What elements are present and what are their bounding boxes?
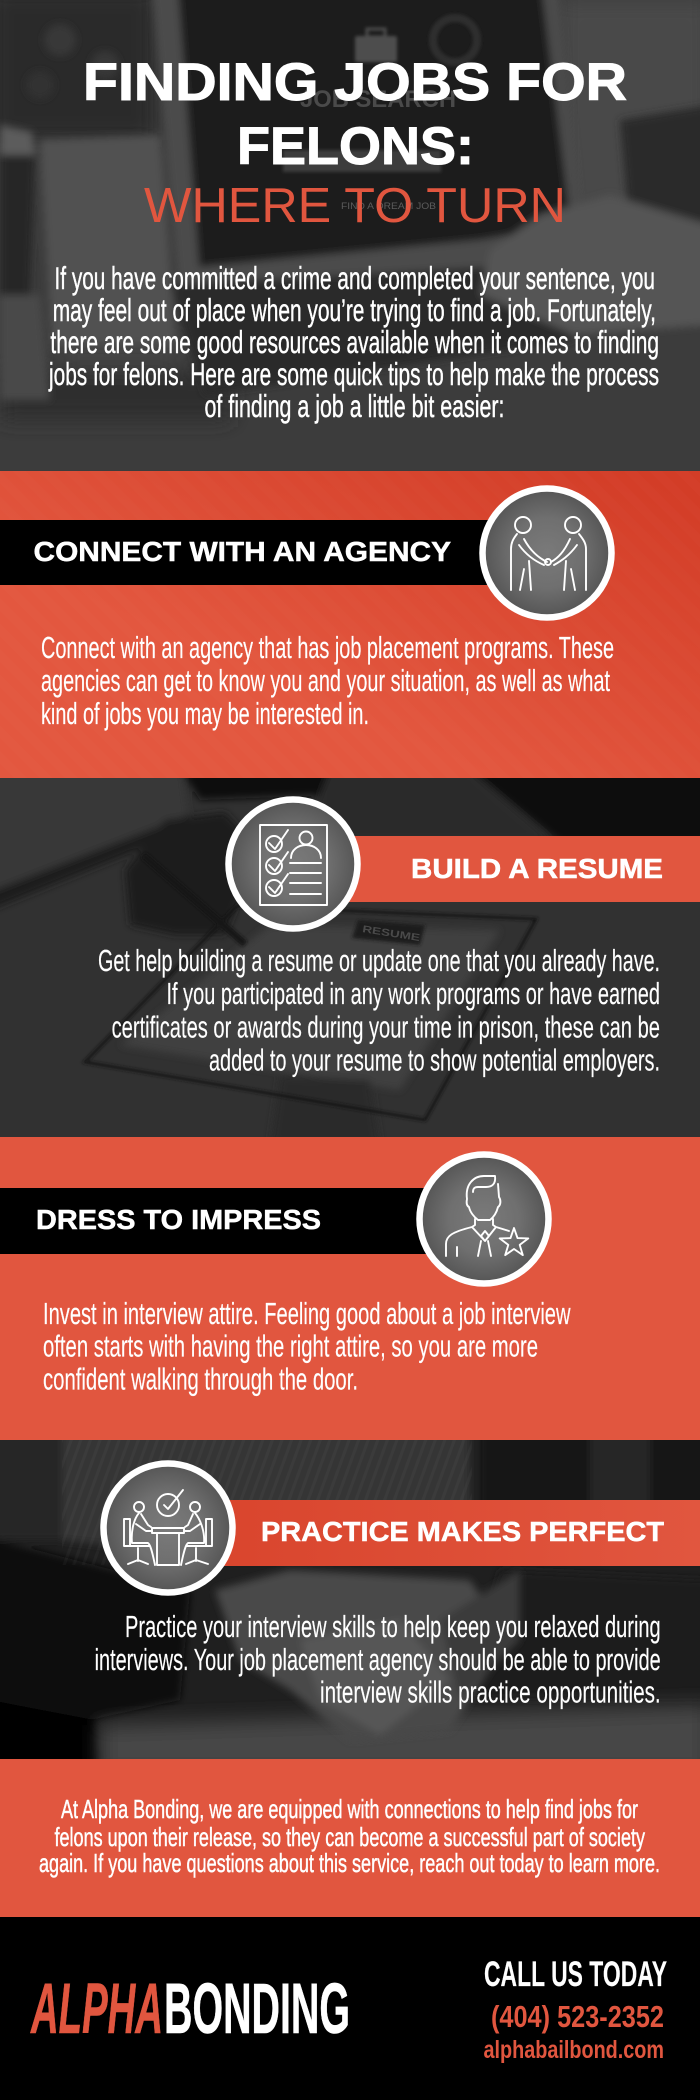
title: FINDING JOBS FOR [83, 53, 627, 112]
intro text [48, 260, 659, 424]
resume photo background: RESUME [362, 924, 421, 944]
header photo background [0, 0, 700, 471]
heading bar: dress to impress [0, 1188, 440, 1254]
heading bar: connect with an agency: CONNECT WITH AN AGENCY [34, 536, 451, 567]
logo: Alpha Bonding: BONDING [164, 1970, 350, 2049]
panel: connect with an agency [0, 471, 700, 778]
contact details: (404) 523-2352 [491, 1999, 664, 2034]
handshake photo background [0, 1430, 700, 1775]
icon: handshake [482, 488, 612, 618]
body text: dress to impress: confident walking through the door. [43, 1362, 358, 1397]
heading bar: build a resume: BUILD A RESUME [411, 853, 663, 884]
panel: dress to impress [0, 1137, 700, 1440]
body text: dress to impress [43, 1296, 571, 1397]
panel: build a resume [0, 770, 700, 1145]
panel: practice makes perfect [0, 1430, 700, 1775]
logo: Alpha Bonding: ALPHA [30, 1970, 163, 2049]
icon: interview at table [104, 1464, 232, 1592]
icon: man in suit with star [420, 1154, 548, 1284]
body text: connect with an agency [41, 630, 614, 731]
heading bar: connect with an agency [0, 520, 500, 585]
header photo background: JOB SEARCH [300, 86, 456, 113]
title: FELONS: [237, 117, 474, 176]
contact details [484, 1955, 667, 2064]
icon: resume checklist [228, 800, 358, 928]
body text: connect with an agency: kind of jobs you may be interested in. [41, 696, 369, 731]
panel: footer [0, 1917, 700, 2100]
heading bar: practice makes perfect [212, 1500, 700, 1566]
title [83, 53, 627, 233]
body text: practice makes perfect [95, 1609, 661, 1710]
panel: closing statement [0, 1759, 700, 1917]
heading bar: practice makes perfect: PRACTICE MAKES PERFECT [261, 1516, 664, 1547]
body text: build a resume [98, 943, 660, 1077]
intro text: of finding a job a little bit easier: [204, 388, 504, 424]
resume photo background [0, 770, 700, 1145]
header photo background: FIND A DREAM JOB [341, 201, 436, 211]
title: WHERE TO TURN [144, 179, 566, 233]
heading bar: build a resume [300, 836, 700, 902]
heading bar: dress to impress: DRESS TO IMPRESS [36, 1204, 321, 1235]
